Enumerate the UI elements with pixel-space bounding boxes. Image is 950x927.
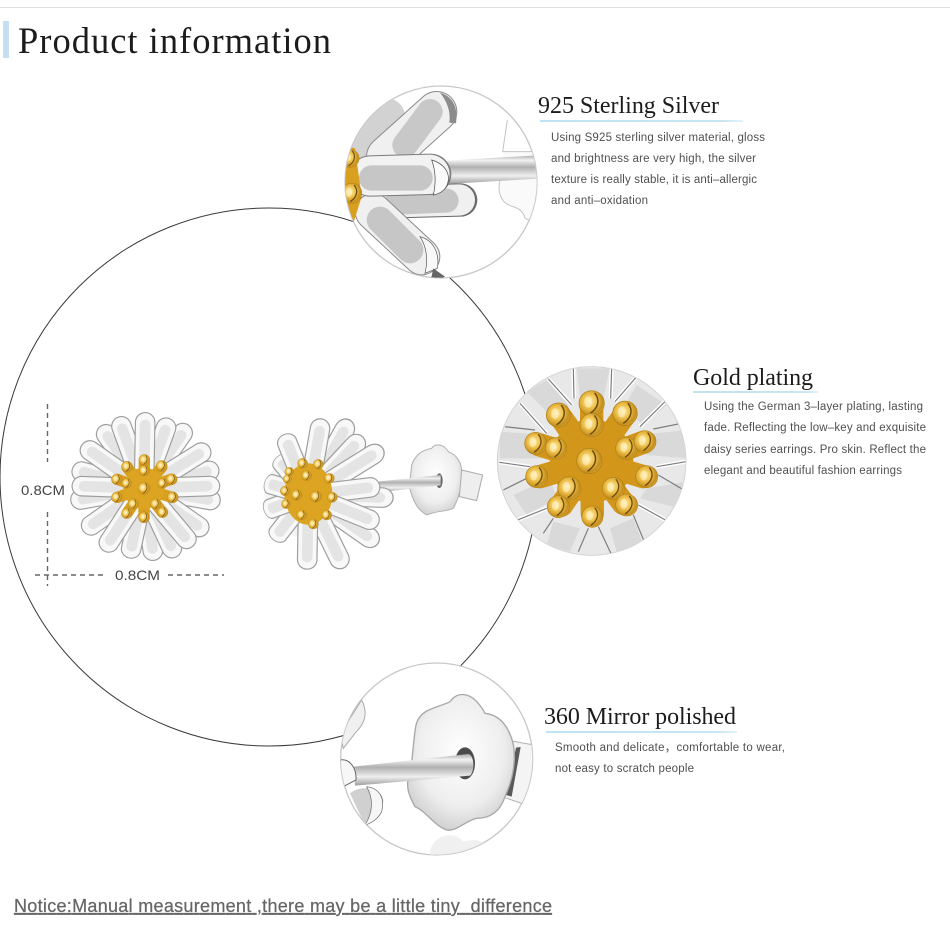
callout: 925 Sterling Silver: and brightness are very high, the silver xyxy=(551,153,756,165)
backing xyxy=(409,445,462,515)
callout: 925 Sterling Silver: texture is really stable, it is anti–allergic xyxy=(551,174,757,186)
callout: 360 Mirror polished: Smooth and delicate，comfortable to wear, xyxy=(555,742,785,754)
callout: Gold plating: fade. Reflecting the low–key and exquisite xyxy=(704,422,926,434)
wing xyxy=(505,740,532,804)
callout: 360 Mirror polished: 360 Mirror polished xyxy=(544,704,736,730)
detail circle: gold stamens xyxy=(497,367,690,555)
middle petal xyxy=(370,174,431,176)
bottom petal xyxy=(373,212,422,257)
callout: 925 Sterling Silver: and anti–oxidation xyxy=(551,195,648,207)
dimension label width: 0.8CM xyxy=(115,567,160,583)
callout: Gold plating: Using the German 3–layer plating, lasting xyxy=(704,401,923,413)
callout: 925 Sterling Silver xyxy=(538,93,765,207)
detail circle: sterling silver petals xyxy=(341,86,543,283)
post xyxy=(447,155,543,184)
callout: Gold plating: Gold plating xyxy=(693,365,813,391)
callout: 925 Sterling Silver: 925 Sterling Silver xyxy=(538,93,719,119)
upper left petal xyxy=(353,117,387,160)
callout: Gold plating: daisy series earrings. Pro skin. Reflect the xyxy=(704,444,926,456)
backing plate xyxy=(408,694,514,830)
callout: 360 Mirror polished: not easy to scratch people xyxy=(555,763,694,775)
daisy front xyxy=(80,422,210,551)
large circle outline xyxy=(0,208,538,746)
callout: Gold plating: elegant and beautiful fashion earrings xyxy=(704,465,902,477)
petal fragments xyxy=(340,700,365,748)
reflection xyxy=(430,836,483,855)
earring front view with dimensions xyxy=(21,404,224,586)
post hole xyxy=(436,473,443,488)
backing fragment xyxy=(498,120,537,220)
dimension label height: 0.8CM xyxy=(21,482,65,498)
petal textures xyxy=(500,368,687,552)
lower petal xyxy=(397,200,461,202)
post hole xyxy=(455,747,475,779)
gold beads xyxy=(525,391,658,527)
top petal xyxy=(387,112,437,157)
backing wing xyxy=(459,470,483,501)
dimension lines xyxy=(35,404,224,586)
petals xyxy=(265,429,382,560)
gold body xyxy=(540,408,643,513)
post xyxy=(377,475,441,493)
title: Product information xyxy=(18,20,331,61)
post xyxy=(353,754,473,786)
callout: Gold plating xyxy=(693,365,926,477)
detail circle: mirror polished backing xyxy=(340,663,543,858)
notice: Notice:Manual measurement ,there may be a little tiny difference xyxy=(14,896,552,916)
earring side view xyxy=(265,429,483,560)
callout: 360 Mirror polished xyxy=(544,704,785,775)
callout: 925 Sterling Silver: Using S925 sterling silver material, gloss xyxy=(551,132,765,144)
petal spokes xyxy=(499,368,690,522)
gold center sliver xyxy=(345,148,362,222)
